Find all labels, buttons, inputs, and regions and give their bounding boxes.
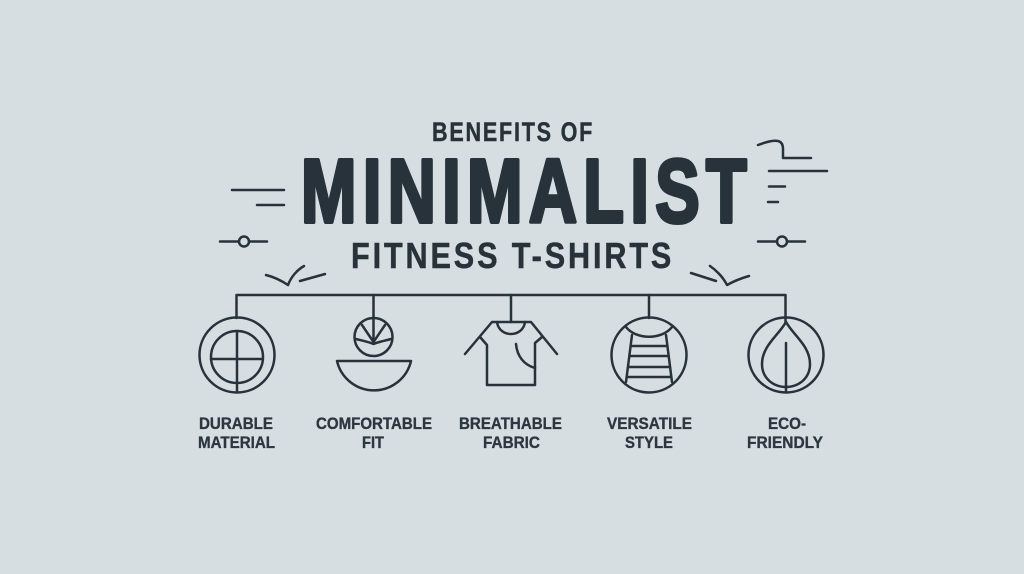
label: comfortable fit bbox=[316, 415, 432, 452]
label: breathable fabric: FABRIC bbox=[483, 434, 540, 452]
label: breathable fabric bbox=[459, 415, 562, 452]
label: eco-friendly: FRIENDLY bbox=[747, 434, 823, 452]
label: eco-friendly: ECO- bbox=[768, 415, 806, 433]
heading: benefits of: BENEFITS OF bbox=[432, 118, 594, 148]
icon: versatile style bbox=[612, 318, 686, 392]
connector tree bbox=[236, 295, 786, 341]
label: eco-friendly bbox=[747, 415, 823, 452]
decoration: left tick marks bbox=[266, 266, 325, 285]
heading: minimalist: MINIMALIST bbox=[301, 140, 753, 241]
label: versatile style bbox=[607, 415, 692, 452]
label: comfortable fit: COMFORTABLE bbox=[316, 415, 432, 433]
label: breathable fabric: BREATHABLE bbox=[459, 415, 562, 433]
decoration: right node line bbox=[758, 236, 805, 246]
decoration: left speed lines bbox=[232, 190, 284, 205]
label: durable material: MATERIAL bbox=[198, 434, 275, 452]
decoration: right tick marks bbox=[691, 266, 749, 285]
label: versatile style: STYLE bbox=[625, 434, 673, 452]
label: versatile style: VERSATILE bbox=[607, 415, 692, 433]
title block bbox=[301, 118, 753, 277]
decoration: left node line bbox=[220, 236, 267, 246]
decoration: right squiggle and lines bbox=[758, 141, 827, 202]
label: durable material: DURABLE bbox=[199, 415, 273, 433]
heading: fitness t-shirts: FITNESS T-SHIRTS bbox=[351, 237, 674, 277]
icon: durable material bbox=[200, 318, 274, 392]
icon: comfortable fit bbox=[337, 318, 411, 390]
label: comfortable fit: FIT bbox=[362, 434, 384, 452]
label: durable material bbox=[198, 415, 275, 452]
icon: breathable fabric t-shirt bbox=[465, 322, 557, 385]
icon: eco-friendly leaf drop bbox=[748, 318, 824, 392]
